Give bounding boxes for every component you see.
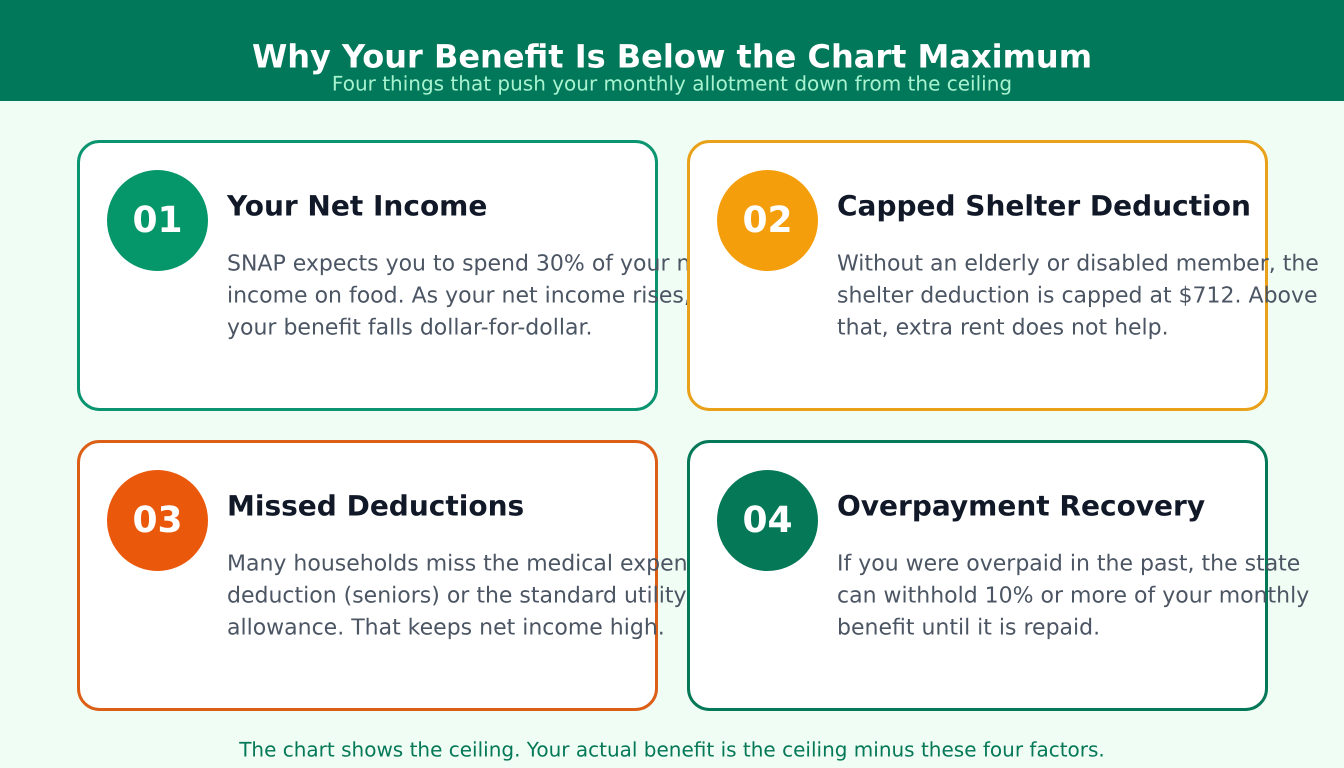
panel: capped shelter deduction bbox=[688, 142, 1319, 410]
heading: overpayment recovery: Overpayment Recovery bbox=[837, 490, 1205, 522]
heading: missed deductions: Missed Deductions bbox=[227, 490, 524, 522]
panel: overpayment recovery bbox=[688, 442, 1309, 710]
subtitle: Four things that push your monthly allotment down from the ceiling bbox=[332, 72, 1012, 96]
icon: number 04 bbox=[717, 470, 818, 571]
icon: number 03 bbox=[107, 470, 208, 571]
text block: missed deductions description: allowance. That keeps net income high. bbox=[227, 616, 665, 640]
text block: net income description: your benefit falls dollar-for-dollar. bbox=[227, 316, 592, 340]
text block: shelter description: Without an elderly or disabled member, the bbox=[837, 252, 1319, 276]
header band bbox=[0, 0, 1344, 101]
title: Why Your Benefit Is Below the Chart Maximum bbox=[252, 38, 1092, 76]
icon: number 04: 04 bbox=[742, 500, 793, 541]
text block: missed deductions description: deduction (seniors) or the standard utility bbox=[227, 584, 687, 608]
text block: net income description bbox=[227, 252, 713, 340]
text block: overpayment description: can withhold 10% or more of your monthly bbox=[837, 584, 1309, 608]
text block: missed deductions description: Many households miss the medical expense bbox=[227, 552, 713, 576]
icon: number 01 bbox=[107, 170, 208, 271]
text block: overpayment description: benefit until it is repaid. bbox=[837, 616, 1100, 640]
text block: net income description: income on food. As your net income rises, bbox=[227, 284, 691, 308]
text block: shelter description bbox=[837, 252, 1319, 340]
text block: overpayment description: If you were overpaid in the past, the state bbox=[837, 552, 1300, 576]
text block: missed deductions description bbox=[227, 552, 713, 640]
panel: missed deductions bbox=[78, 442, 713, 710]
heading: capped shelter deduction: Capped Shelter Deduction bbox=[837, 190, 1251, 222]
text block: overpayment description bbox=[837, 552, 1309, 640]
icon: number 02: 02 bbox=[742, 200, 793, 241]
icon: number 02 bbox=[717, 170, 818, 271]
icon: number 01: 01 bbox=[132, 200, 183, 241]
panel: net income bbox=[78, 142, 713, 410]
icon: number 03: 03 bbox=[132, 500, 183, 541]
text block: shelter description: that, extra rent does not help. bbox=[837, 316, 1169, 340]
text block: shelter description: shelter deduction is capped at $712. Above bbox=[837, 284, 1318, 308]
text block: net income description: SNAP expects you to spend 30% of your net bbox=[227, 252, 713, 276]
footer note: The chart shows the ceiling. Your actual benefit is the ceiling minus these four factors. bbox=[238, 738, 1105, 762]
heading: your net income: Your Net Income bbox=[226, 190, 487, 222]
